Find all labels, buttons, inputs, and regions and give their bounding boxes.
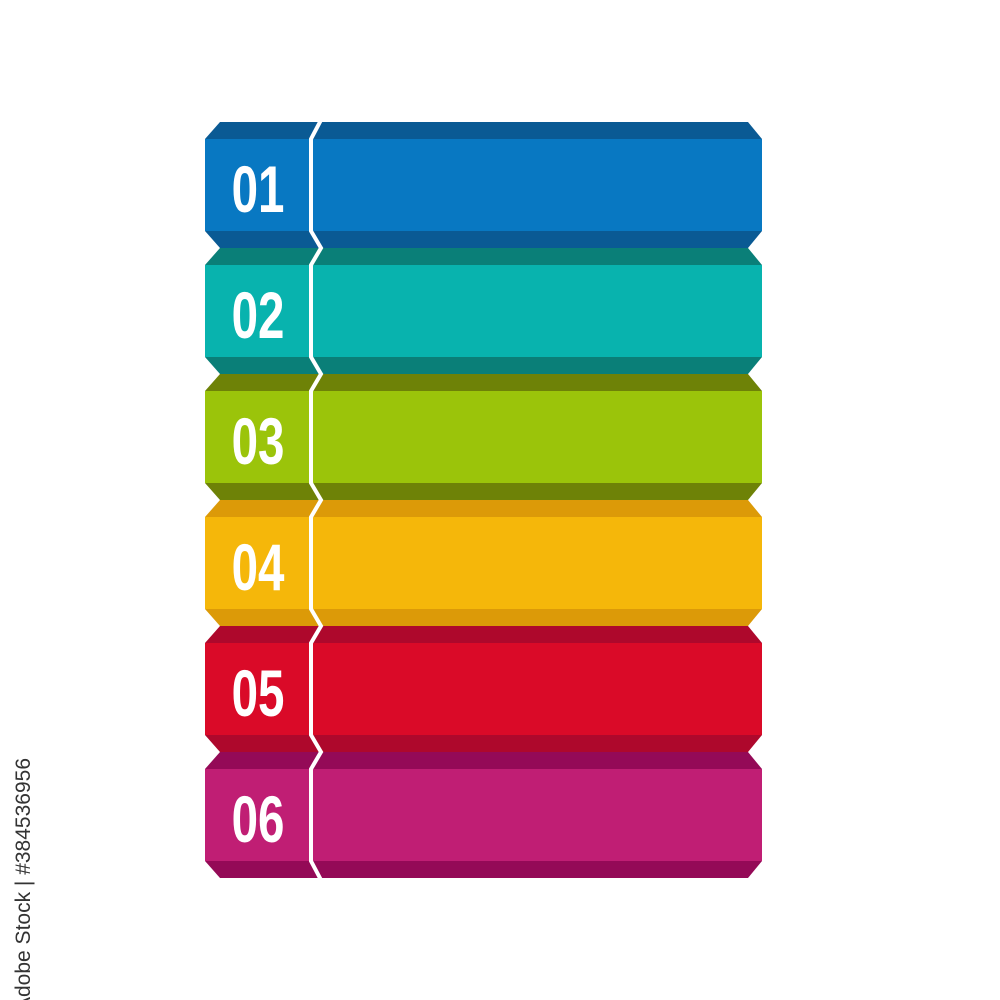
- row 01: [205, 122, 762, 248]
- separator zigzag line: [311, 120, 321, 880]
- number 04: 04: [232, 531, 284, 605]
- number 03: 03: [232, 405, 284, 479]
- number 06: 06: [232, 783, 284, 857]
- number 02: 02: [232, 279, 284, 353]
- row 06: [205, 752, 762, 878]
- row 02: [205, 248, 762, 374]
- number 05: 05: [232, 657, 284, 731]
- number 01: 01: [232, 153, 284, 227]
- row 04: [205, 500, 762, 626]
- row 05: [205, 626, 762, 752]
- row 03: [205, 374, 762, 500]
